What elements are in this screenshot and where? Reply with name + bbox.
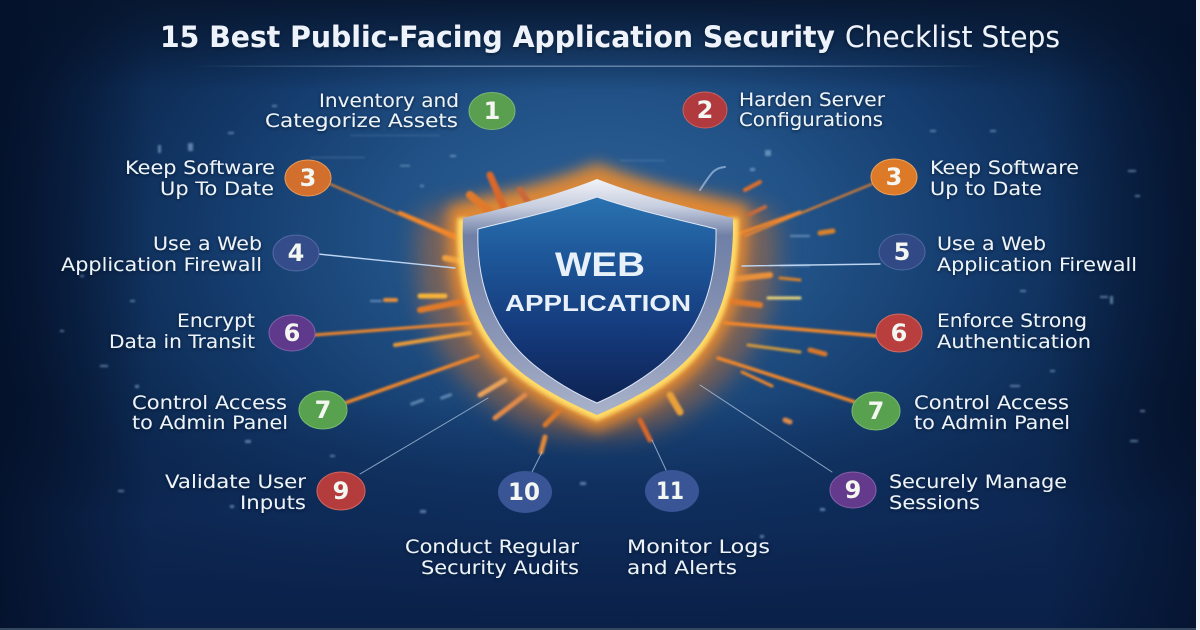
step 6 right: 6 <box>891 319 907 347</box>
starburst behind shield <box>314 167 880 474</box>
step 10: 10 <box>508 478 540 506</box>
step 10: Conduct Regular <box>405 536 579 558</box>
shield <box>463 179 733 415</box>
step 7 right: to Admin Panel <box>914 412 1070 434</box>
shield rim <box>463 179 733 415</box>
step 9 left <box>165 471 365 514</box>
step 7 left <box>132 391 347 434</box>
shield label <box>505 246 691 316</box>
step 6 right: Enforce Strong <box>937 310 1087 332</box>
step 11: and Alerts <box>627 557 737 579</box>
step 9 right: Securely Manage <box>889 471 1067 493</box>
step 9 left: 9 <box>333 477 349 505</box>
step 3 right <box>871 157 1079 200</box>
step 7 right: Control Access <box>914 392 1069 414</box>
step 2: Harden Server <box>739 89 885 111</box>
step 3 right: 3 <box>886 163 902 191</box>
step 3 left <box>125 157 331 200</box>
step 10: Security Audits <box>421 557 579 579</box>
step 3 left: 3 <box>300 164 316 192</box>
step 11: 11 <box>656 477 684 505</box>
step 7 right <box>852 392 1070 434</box>
step 3 right: Keep Software <box>930 157 1079 179</box>
step 9 right <box>830 471 1067 514</box>
step 9 right: Sessions <box>889 492 980 514</box>
shield face <box>478 197 716 403</box>
step 11: Monitor Logs <box>627 536 770 558</box>
step 7 left: to Admin Panel <box>132 412 288 434</box>
step 6 left: Encrypt <box>177 310 255 332</box>
step 6 left: Data in Transit <box>109 331 255 353</box>
step 4: Use a Web <box>153 233 262 255</box>
step 10 <box>405 471 579 579</box>
step 1: Inventory and <box>319 90 459 112</box>
step 2 <box>683 89 885 131</box>
step 6 right <box>876 310 1091 353</box>
step 2: 2 <box>697 96 713 124</box>
step 1: Categorize Assets <box>265 110 458 132</box>
shield label: WEB <box>555 246 645 284</box>
step 1 <box>265 90 515 132</box>
step 5 <box>879 233 1137 276</box>
step 1: 1 <box>484 97 500 125</box>
step 3 left: Keep Software <box>125 157 275 179</box>
step 4: Application Firewall <box>61 254 262 276</box>
step 5: Application Firewall <box>937 254 1137 276</box>
step 6 right: Authentication <box>937 331 1091 353</box>
step 2: Configurations <box>739 109 883 131</box>
step 4 <box>61 233 319 276</box>
step 5: 5 <box>894 238 910 266</box>
step 7 left: Control Access <box>132 392 287 414</box>
shield label: APPLICATION <box>505 290 691 316</box>
step 6 left: 6 <box>284 319 300 347</box>
step 9 left: Inputs <box>240 492 306 514</box>
step 9 right: 9 <box>845 476 861 504</box>
step 7 right: 7 <box>868 397 884 425</box>
step 6 left <box>109 310 315 353</box>
shield glow <box>463 218 733 415</box>
step 4: 4 <box>288 239 304 267</box>
title underline <box>190 66 990 67</box>
title: Checklist Steps <box>845 20 1060 54</box>
step 11 <box>627 470 770 579</box>
step 7 left: 7 <box>315 396 331 424</box>
step 9 left: Validate User <box>165 471 306 493</box>
step 3 left: Up To Date <box>160 178 274 200</box>
step 3 right: Up to Date <box>930 178 1042 200</box>
decorative particles <box>60 105 1145 538</box>
step 5: Use a Web <box>937 233 1046 255</box>
title: 15 Best Public-Facing Application Security <box>160 20 835 54</box>
